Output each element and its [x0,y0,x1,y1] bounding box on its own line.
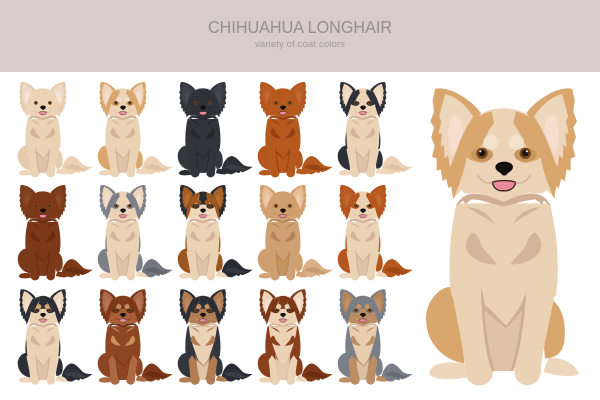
dog 7: blue and cream [98,185,173,280]
title: CHIHUAHUA LONGHAIR [208,17,392,37]
dog 5: cream and black [338,82,413,177]
dog 6: chocolate [18,185,93,280]
dog 1: cream [18,82,93,177]
subtitle: variety of coat colors [255,39,345,50]
dog 10: red and cream [338,185,413,280]
dog 4: red [258,82,333,177]
dog 15: blue and tan [338,289,413,385]
dog 2: cream and fawn [98,82,173,177]
large featured dog [426,88,579,385]
header banner [0,0,600,72]
dog 8: tricolor [178,185,253,280]
dog 9: fawn [258,185,333,280]
dog 3: black [178,82,253,177]
dog 14: chocolate and cream [258,289,333,385]
dog 12: chocolate and tan [98,289,173,385]
dog 13: black and tan [178,289,253,385]
dog 11: black and cream [18,289,93,385]
